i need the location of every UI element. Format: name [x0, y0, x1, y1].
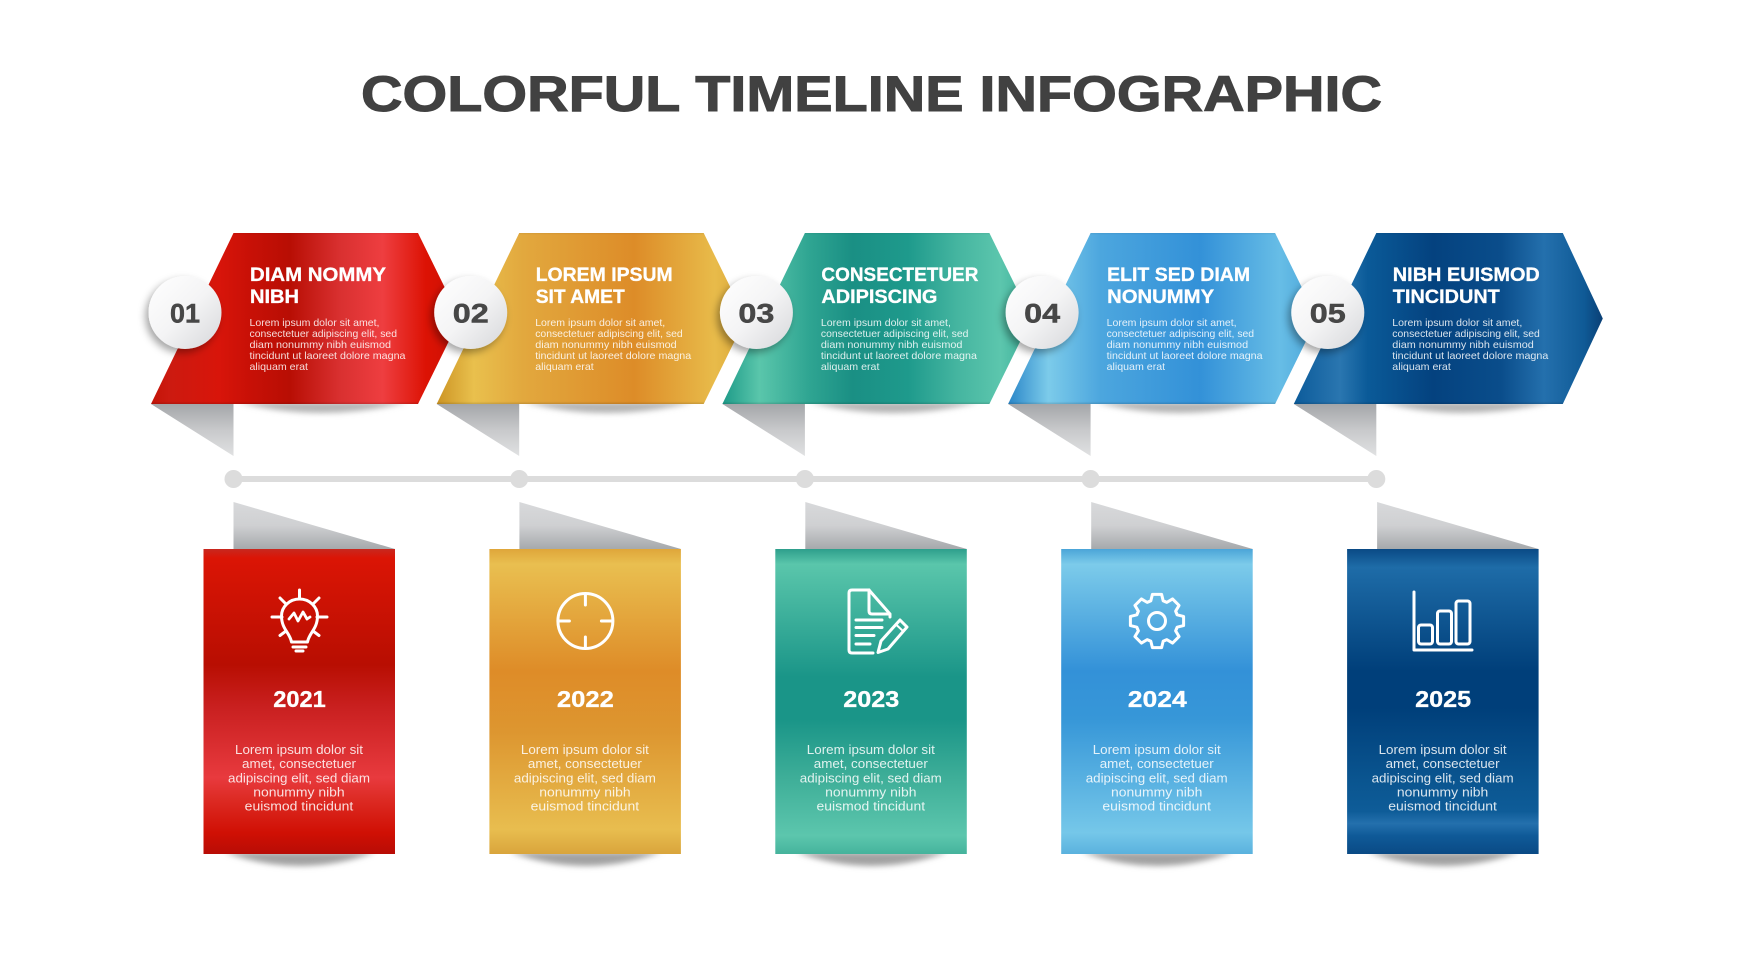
text: banner 02: diam nonummy nibh euismod: [535, 339, 677, 351]
heading: banner 04: [1107, 265, 1250, 308]
heading: banner 05: TINCIDUNT: [1393, 287, 1500, 308]
text: banner 04: consectetuer adipiscing elit, sed: [1107, 328, 1254, 340]
text: card 2022: nonummy nibh: [539, 785, 631, 799]
text: banner 05: [1392, 317, 1548, 373]
text: card 2022: amet, consectetuer: [528, 757, 642, 771]
text: banner 04: Lorem ipsum dolor sit amet,: [1107, 317, 1237, 329]
text: card 2025: [1372, 743, 1514, 814]
text: card 2024: nonummy nibh: [1111, 785, 1202, 799]
text: banner 05: tincidunt ut laoreet dolore magna: [1392, 350, 1548, 362]
text: card 2023: nonummy nibh: [825, 785, 917, 799]
panel: banner 02: [434, 233, 746, 456]
text: banner 05: consectetuer adipiscing elit, sed: [1392, 328, 1540, 340]
text: banner 05: diam nonummy nibh euismod: [1392, 339, 1534, 351]
text: banner 04: tincidunt ut laoreet dolore magna: [1107, 350, 1263, 362]
timeline axis with five nodes: [224, 470, 1385, 488]
year: 2025: 2025: [1415, 686, 1471, 712]
year: 2024: 2024: [1128, 686, 1187, 712]
text: card 2022: adipiscing elit, sed diam: [514, 771, 656, 785]
text: card 2021: adipiscing elit, sed diam: [228, 771, 370, 785]
panel: banner 04: [1006, 233, 1317, 456]
badge: 05: [1291, 276, 1364, 349]
text: card 2025: nonummy nibh: [1397, 785, 1488, 799]
badge: 04: [1006, 276, 1079, 349]
text: banner 05: aliquam erat: [1392, 361, 1451, 373]
text: card 2021: [228, 743, 370, 814]
panel: card 2024: [1061, 502, 1253, 866]
text: banner 05: Lorem ipsum dolor sit amet,: [1392, 317, 1522, 329]
heading: banner 05: NIBH EUISMOD: [1393, 265, 1540, 286]
heading: banner 01: DIAM NOMMY: [250, 265, 386, 286]
panel: card 2025: [1347, 502, 1539, 866]
year: 2021: 2021: [273, 686, 326, 712]
text: card 2023: Lorem ipsum dolor sit: [807, 743, 935, 757]
text: banner 04: diam nonummy nibh euismod: [1107, 339, 1248, 351]
text: banner 04: [1107, 317, 1263, 373]
text: banner 01: consectetuer adipiscing elit, sed: [250, 328, 397, 340]
text: card 2021: amet, consectetuer: [242, 757, 356, 771]
panel: banner 05: [1291, 233, 1603, 456]
text: banner 01: Lorem ipsum dolor sit amet,: [250, 317, 380, 329]
badge: 03: 03: [738, 298, 774, 328]
text: card 2024: amet, consectetuer: [1100, 757, 1214, 771]
heading: banner 01: NIBH: [250, 287, 299, 308]
badge: 01: [148, 276, 222, 349]
text: banner 03: diam nonummy nibh euismod: [821, 339, 963, 351]
year: 2022: 2022: [557, 686, 614, 712]
text: banner 03: [821, 317, 977, 373]
text: banner 03: tincidunt ut laoreet dolore magna: [821, 350, 977, 362]
heading: banner 02: [536, 265, 673, 308]
text: banner 02: Lorem ipsum dolor sit amet,: [535, 317, 665, 329]
text: banner 03: Lorem ipsum dolor sit amet,: [821, 317, 951, 329]
text: banner 01: [250, 317, 406, 373]
badge: 05: 05: [1310, 298, 1346, 328]
text: banner 03: consectetuer adipiscing elit, sed: [821, 328, 969, 340]
text: card 2025: Lorem ipsum dolor sit: [1379, 743, 1507, 757]
heading: banner 03: ADIPISCING: [821, 287, 937, 308]
text: card 2022: Lorem ipsum dolor sit: [521, 743, 649, 757]
panel: card 2023: [775, 502, 967, 866]
badge: 02: 02: [453, 298, 489, 328]
badge: 02: [434, 276, 507, 349]
heading: banner 03: CONSECTETUER: [821, 265, 979, 286]
heading: banner 01: [250, 265, 386, 308]
text: banner 04: aliquam erat: [1107, 361, 1165, 373]
text: banner 01: tincidunt ut laoreet dolore magna: [250, 350, 406, 362]
icon: target: [558, 594, 613, 648]
year: 2023: 2023: [843, 686, 899, 712]
text: card 2024: [1086, 743, 1228, 814]
text: card 2024: adipiscing elit, sed diam: [1086, 771, 1228, 785]
text: card 2021: Lorem ipsum dolor sit: [235, 743, 364, 757]
text: card 2022: [514, 743, 656, 814]
text: card 2023: euismod tincidunt: [816, 800, 926, 814]
text: card 2022: euismod tincidunt: [531, 800, 640, 814]
text: card 2024: euismod tincidunt: [1102, 800, 1212, 814]
heading: banner 05: [1393, 265, 1540, 308]
badge: 03: [720, 276, 793, 349]
text: banner 02: [535, 317, 691, 373]
heading: banner 04: NONUMMY: [1107, 287, 1214, 308]
text: banner 02: consectetuer adipiscing elit, sed: [535, 328, 683, 340]
text: banner 02: tincidunt ut laoreet dolore magna: [535, 350, 691, 362]
text: card 2025: euismod tincidunt: [1388, 800, 1497, 814]
text: card 2024: Lorem ipsum dolor sit: [1093, 743, 1221, 757]
text: card 2023: amet, consectetuer: [814, 757, 928, 771]
text: card 2021: nonummy nibh: [253, 785, 345, 799]
panel: card 2022: [489, 502, 681, 866]
badge: 04: 04: [1024, 298, 1060, 328]
heading: banner 03: [821, 265, 979, 308]
icon: light bulb: [272, 590, 327, 651]
text: banner 01: diam nonummy nibh euismod: [250, 339, 391, 351]
text: banner 03: aliquam erat: [821, 361, 879, 373]
heading: banner 02: SIT AMET: [536, 287, 625, 308]
text: card 2021: euismod tincidunt: [245, 800, 354, 814]
heading: banner 02: LOREM IPSUM: [536, 265, 673, 286]
text: card 2025: amet, consectetuer: [1386, 757, 1500, 771]
panel: banner 03: [720, 233, 1031, 456]
title: COLORFUL TIMELINE INFOGRAPHIC: [361, 66, 1382, 122]
text: card 2023: adipiscing elit, sed diam: [800, 771, 942, 785]
panel: card 2021: [204, 502, 395, 866]
panel: banner 01: [148, 233, 460, 456]
icon: document and pencil: [849, 590, 907, 653]
text: card 2025: adipiscing elit, sed diam: [1372, 771, 1514, 785]
icon: bar chart: [1414, 592, 1472, 650]
text: banner 01: aliquam erat: [250, 361, 308, 373]
text: banner 02: aliquam erat: [535, 361, 594, 373]
icon: gear: [1130, 594, 1184, 648]
text: card 2023: [800, 743, 942, 814]
heading: banner 04: ELIT SED DIAM: [1107, 265, 1250, 286]
badge: 01: 01: [170, 298, 200, 328]
